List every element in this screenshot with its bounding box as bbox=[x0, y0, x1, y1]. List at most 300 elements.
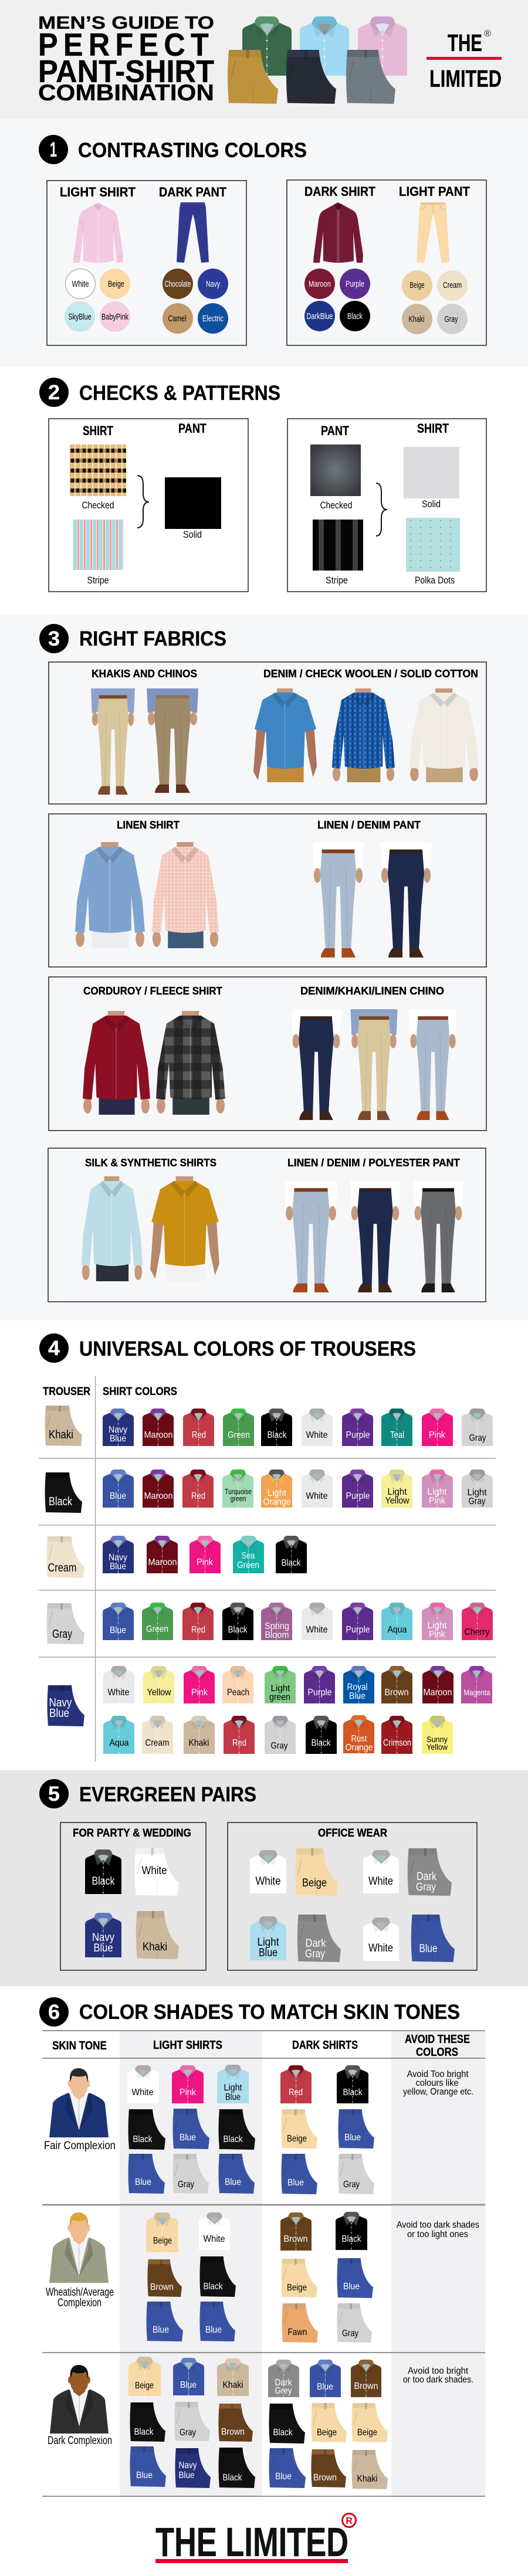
swatch: solid shirt bbox=[404, 447, 459, 510]
person: fair complexion bbox=[44, 2068, 116, 2152]
shirt: brown: Brown bbox=[385, 1688, 408, 1698]
shirt: navy blue: Navy bbox=[109, 1425, 127, 1435]
shirt: magenta bbox=[461, 1666, 492, 1703]
shirt: white: White bbox=[306, 1491, 328, 1501]
swatches: light shirt colours: BabyPink bbox=[101, 312, 128, 322]
light shirts: Blue bbox=[136, 2470, 153, 2480]
shirt: aqua bbox=[103, 1716, 134, 1754]
shirt: light gray: Gray bbox=[468, 1496, 486, 1506]
shirt: aqua bbox=[381, 1603, 412, 1640]
shirt: rust orange: Rust bbox=[351, 1734, 367, 1744]
section 6: color shades to match skin tones bbox=[39, 1997, 485, 2496]
figures: silk and synthetic shirts bbox=[82, 1176, 219, 1281]
shirt: green bbox=[223, 1409, 254, 1446]
light shirts: Brown bbox=[150, 2282, 174, 2292]
label: shirt: SHIRT bbox=[83, 423, 113, 438]
shirt: red: Red bbox=[191, 1625, 205, 1635]
pair: black shirt bbox=[85, 1849, 121, 1894]
shirt: gray: Gray bbox=[469, 1433, 486, 1443]
dark shirts: Beige bbox=[287, 2134, 307, 2144]
pair: dark gray trouser bbox=[297, 1915, 341, 1962]
light shirts: Blue bbox=[205, 2325, 222, 2335]
shirt: light gray: Light bbox=[467, 1488, 487, 1498]
light shirts bbox=[127, 2065, 255, 2194]
label: light pant: LIGHT PANT bbox=[399, 184, 471, 199]
shirt: green: Green bbox=[228, 1430, 250, 1440]
heading: 6 bbox=[48, 2001, 60, 2024]
shirt: maroon: Maroon bbox=[144, 1430, 172, 1440]
shirt: white bbox=[302, 1469, 333, 1508]
light shirts: White bbox=[203, 2234, 225, 2244]
icon: maroon shirt bbox=[313, 202, 363, 263]
shirt: rust orange: Orange bbox=[345, 1743, 373, 1753]
advice: wheatish complexion bbox=[397, 2220, 479, 2239]
swatches: light pant colours: Beige bbox=[409, 280, 425, 290]
heading: CONTRASTING COLORS bbox=[78, 139, 307, 162]
shirt: maroon bbox=[422, 1666, 453, 1703]
shirt: light pink: Pink bbox=[429, 1496, 446, 1506]
shirt: white: White bbox=[306, 1430, 328, 1440]
swatch: polka dots bbox=[406, 518, 460, 586]
title bbox=[38, 12, 214, 106]
column heading: trouser: TROUSER bbox=[43, 1386, 90, 1398]
dark shirts bbox=[268, 2360, 388, 2489]
light shirts: Black bbox=[134, 2427, 154, 2437]
table header: DARK SHIRTS bbox=[292, 2039, 358, 2052]
light shirts: Blue bbox=[178, 2470, 195, 2480]
light shirts: Blue bbox=[225, 2092, 241, 2102]
pair: dark gray trouser: Dark bbox=[417, 1871, 436, 1883]
light shirts: Gray bbox=[178, 2180, 194, 2190]
pair: navy blue shirt: Blue bbox=[94, 1942, 113, 1954]
shirt: light green: green bbox=[269, 1692, 290, 1702]
shirt: maroon bbox=[143, 1409, 174, 1446]
shirt: turquoise green: Turquoise bbox=[225, 1487, 252, 1496]
swatches: light shirt colours: SkyBlue bbox=[68, 312, 92, 322]
trouser: navy blue bbox=[47, 1685, 84, 1726]
pair: khaki trouser bbox=[136, 1911, 179, 1959]
shirt: black: Black bbox=[282, 1558, 301, 1568]
shirt: crimson bbox=[381, 1716, 412, 1754]
light shirts: Pink bbox=[180, 2088, 197, 2098]
illustration: folded shirts and trousers bbox=[228, 16, 407, 104]
shirt: light pink: Light bbox=[427, 1487, 447, 1497]
swatches: light shirt colours bbox=[65, 269, 130, 332]
label: LINEN SHIRT bbox=[117, 819, 180, 831]
swatches: light shirt colours: White bbox=[72, 279, 89, 289]
shirt: red: Red bbox=[192, 1430, 206, 1440]
heading: 4 bbox=[48, 1337, 60, 1360]
footer logo: The Limited: THE LIMITED bbox=[155, 2519, 348, 2565]
panel: corduroy and fleece bbox=[49, 977, 486, 1131]
shirt: black bbox=[306, 1716, 337, 1754]
shirt: turquoise green: green bbox=[230, 1494, 246, 1503]
shirt: khaki bbox=[184, 1716, 215, 1754]
shirt: blue bbox=[103, 1603, 134, 1640]
row: fair complexion bbox=[44, 2065, 473, 2194]
label: FOR PARTY & WEDDING bbox=[73, 1827, 191, 1839]
advice: wheatish complexion: or too light ones bbox=[407, 2229, 468, 2239]
swatches: dark shirt colours: Black bbox=[347, 311, 363, 321]
light shirts: Beige bbox=[135, 2381, 154, 2391]
dark shirts: Black bbox=[343, 2088, 363, 2098]
pair: white shirt bbox=[363, 1917, 399, 1961]
label: DENIM/KHAKI/LINEN CHINO bbox=[300, 985, 444, 997]
dark shirts: Beige bbox=[357, 2428, 377, 2438]
shirt: white bbox=[302, 1409, 333, 1446]
row: cream trouser bbox=[47, 1536, 307, 1578]
label: dark pant: DARK PANT bbox=[159, 185, 227, 199]
swatch: checked pant: Checked bbox=[320, 500, 352, 511]
swatches: dark shirt colours: Purple bbox=[346, 279, 364, 289]
shirt: royal blue: Blue bbox=[349, 1691, 365, 1701]
pair: dark gray trouser bbox=[408, 1848, 452, 1896]
advice: fair complexion: colours like bbox=[415, 2078, 459, 2088]
icon: navy jeans bbox=[177, 202, 209, 263]
dark shirts: Brown bbox=[284, 2234, 307, 2244]
shirt: sunny yellow bbox=[422, 1716, 453, 1754]
swatches: dark pant colours bbox=[163, 269, 228, 334]
pair: white shirt: White bbox=[368, 1942, 393, 1954]
shirt: navy blue: Navy bbox=[109, 1553, 127, 1563]
panel: khakis and chinos bbox=[49, 662, 486, 804]
shirt: light green: Light bbox=[271, 1684, 290, 1693]
shirt: purple: Purple bbox=[307, 1688, 332, 1698]
person: dark complexion bbox=[48, 2365, 112, 2447]
advice: fair complexion bbox=[403, 2069, 473, 2097]
shirt: khaki: Khaki bbox=[189, 1738, 209, 1748]
light shirts: Black bbox=[203, 2282, 223, 2292]
shirt: light pink bbox=[422, 1603, 453, 1640]
dark shirts: Gray bbox=[343, 2180, 360, 2190]
swatch: polka dots: Polka Dots bbox=[415, 575, 455, 586]
figures: linen shirts bbox=[75, 842, 219, 948]
shirt: cherry: Cherry bbox=[465, 1627, 489, 1637]
pair: white shirt bbox=[363, 1850, 399, 1893]
shirt: red: Red bbox=[232, 1738, 246, 1748]
shirt: purple: Purple bbox=[346, 1625, 370, 1635]
swatches: dark pant colours: Camel bbox=[168, 314, 187, 324]
figures: khaki and chino trousers bbox=[91, 688, 198, 795]
swatches: light pant colours bbox=[402, 270, 468, 334]
shirt: blue: Blue bbox=[110, 1491, 126, 1501]
swatch: solid black bbox=[165, 477, 221, 540]
shirt: sunny yellow: Yellow bbox=[427, 1742, 448, 1752]
section 2: checks and patterns bbox=[39, 378, 486, 592]
dark shirts: Beige bbox=[287, 2283, 307, 2293]
dark shirts: Blue bbox=[344, 2133, 361, 2143]
shirt: black bbox=[276, 1536, 307, 1573]
shirt: rust orange bbox=[343, 1715, 374, 1753]
trouser: navy blue: Navy bbox=[49, 1696, 72, 1709]
logo: The Limited bbox=[427, 29, 502, 92]
dark shirts: Brown bbox=[313, 2473, 337, 2483]
label: LINEN / DENIM / POLYESTER PANT bbox=[287, 1157, 460, 1169]
table rule: second row bbox=[42, 2204, 485, 2205]
row: wheatish complexion bbox=[46, 2212, 479, 2343]
pair: white shirt: White bbox=[256, 1875, 280, 1888]
dark shirts: Gray bbox=[342, 2329, 358, 2339]
panel: patterned shirt, solid pant bbox=[49, 419, 248, 592]
swatches: dark shirt colours: DarkBlue bbox=[306, 311, 333, 321]
shirt: green bbox=[142, 1603, 173, 1640]
pair: khaki trouser: Khaki bbox=[143, 1941, 167, 1953]
heading: RIGHT FABRICS bbox=[79, 627, 226, 650]
title: MEN’S GUIDE TO bbox=[38, 12, 214, 33]
panel: dark shirt light pant bbox=[287, 180, 486, 345]
row: navy blue trouser bbox=[47, 1666, 492, 1754]
shirt: white bbox=[302, 1603, 333, 1640]
pair: light blue shirt bbox=[250, 1916, 286, 1960]
label: OFFICE WEAR bbox=[318, 1827, 387, 1839]
logo: The Limited: LIMITED bbox=[429, 65, 502, 92]
shirt: light yellow: Yellow bbox=[385, 1496, 409, 1506]
shirt: black: Black bbox=[311, 1738, 331, 1748]
label: shirt: SHIRT bbox=[417, 421, 449, 436]
figures: linen, denim and polyester trousers bbox=[285, 1181, 463, 1292]
pair: white shirt bbox=[250, 1850, 286, 1893]
shirt: gray: Gray bbox=[271, 1741, 287, 1751]
shirt: sea green: Green bbox=[237, 1560, 259, 1570]
heading: 1 bbox=[50, 138, 57, 161]
shirt: magenta: Magenta bbox=[463, 1688, 490, 1697]
swatches: light pant colours: Gray bbox=[445, 314, 458, 324]
dark shirts: Grey bbox=[275, 2386, 292, 2396]
shirt: gray bbox=[462, 1409, 493, 1446]
shirt: purple: Purple bbox=[346, 1430, 370, 1440]
shirt: maroon: Maroon bbox=[148, 1557, 177, 1567]
swatches: dark pant colours: Chocolate bbox=[164, 279, 191, 289]
shirt: light orange: Orange bbox=[263, 1497, 291, 1507]
light shirts: White bbox=[131, 2088, 154, 2098]
row: khaki trouser bbox=[45, 1406, 493, 1446]
shirt: blue: Blue bbox=[110, 1625, 126, 1635]
person: fair complexion: Fair Complexion bbox=[44, 2140, 116, 2152]
shirt: gray bbox=[265, 1716, 296, 1754]
heading bbox=[39, 1997, 460, 2027]
figures: linen and denim trousers bbox=[313, 842, 432, 958]
trouser: black bbox=[45, 1472, 82, 1513]
light shirts: Blue bbox=[180, 2133, 196, 2143]
icon: pink shirt bbox=[73, 202, 123, 263]
swatches: dark shirt colours: Maroon bbox=[309, 279, 331, 289]
panel: office wear bbox=[228, 1822, 477, 1970]
row: dark complexion bbox=[48, 2357, 473, 2489]
table rules bbox=[39, 1376, 496, 1762]
shirt: aqua: Aqua bbox=[109, 1738, 129, 1748]
brace bbox=[376, 483, 387, 536]
column heading: shirt colors: SHIRT COLORS bbox=[103, 1386, 177, 1398]
light shirts: Blue bbox=[180, 2380, 197, 2390]
shirt: black: Black bbox=[268, 1430, 287, 1440]
heading bbox=[39, 135, 307, 164]
panel: light shirt dark pant bbox=[47, 181, 246, 345]
heading bbox=[39, 624, 226, 653]
heading: 5 bbox=[48, 1783, 60, 1805]
heading: 3 bbox=[48, 627, 60, 650]
trouser: navy blue: Blue bbox=[49, 1707, 69, 1720]
trouser: cream bbox=[47, 1536, 84, 1578]
section 4: universal colors of trousers bbox=[39, 1333, 496, 1762]
figures: corduroy and fleece shirts bbox=[83, 1011, 225, 1115]
trouser: gray bbox=[47, 1603, 84, 1644]
shirt: pink bbox=[184, 1666, 215, 1703]
shirt: red bbox=[183, 1409, 214, 1446]
shirt: peach: Peach bbox=[227, 1688, 249, 1698]
shirt: maroon: Maroon bbox=[424, 1688, 452, 1698]
light shirts: Khaki bbox=[223, 2380, 243, 2390]
shirt: sea green: Sea bbox=[242, 1551, 255, 1561]
table header: COLORS bbox=[416, 2046, 458, 2059]
swatches: dark shirt colours bbox=[304, 269, 370, 331]
table column shading bbox=[120, 2031, 485, 2496]
heading: 2 bbox=[48, 381, 60, 404]
light shirts bbox=[128, 2357, 255, 2488]
table header: LIGHT SHIRTS bbox=[153, 2039, 222, 2052]
dark shirts: Brown bbox=[354, 2381, 378, 2391]
dark shirts: Blue bbox=[275, 2472, 292, 2482]
icon: cream pants bbox=[417, 202, 449, 263]
swatch: stripe pant: Stripe bbox=[326, 575, 348, 586]
dark shirts: Blue bbox=[287, 2178, 304, 2188]
shirt: navy blue: Blue bbox=[110, 1562, 126, 1572]
dark shirts: Blue bbox=[317, 2382, 333, 2392]
shirt: maroon bbox=[143, 1469, 174, 1508]
person: dark complexion: Dark Complexion bbox=[48, 2435, 112, 2447]
heading: EVERGREEN PAIRS bbox=[79, 1783, 256, 1806]
figures: denim, khaki and linen chinos bbox=[292, 1009, 456, 1120]
shirt: teal bbox=[381, 1409, 412, 1446]
light shirts bbox=[146, 2212, 236, 2341]
table header bbox=[52, 2033, 470, 2059]
light shirts: Light bbox=[224, 2083, 242, 2093]
shirt: cream: Cream bbox=[145, 1738, 169, 1748]
shirt: purple: Purple bbox=[346, 1491, 370, 1501]
shirt: yellow bbox=[143, 1666, 174, 1703]
table header: AVOID THESE bbox=[405, 2033, 470, 2046]
trouser: khaki: Khaki bbox=[49, 1428, 73, 1441]
pair: blue trouser: Blue bbox=[419, 1943, 438, 1955]
pair: light blue shirt: Blue bbox=[259, 1947, 277, 1959]
pair: white trouser bbox=[135, 1848, 179, 1896]
panel: silk and synthetic bbox=[48, 1148, 486, 1302]
dark shirts: Black bbox=[273, 2428, 293, 2438]
pair: beige trouser bbox=[296, 1848, 338, 1896]
dark shirts: Fawn bbox=[287, 2327, 307, 2337]
light shirts: Navy bbox=[178, 2460, 197, 2470]
shirt: purple bbox=[304, 1666, 335, 1703]
title: PERFECT bbox=[38, 26, 214, 63]
person: wheatish complexion: Wheatish/Average bbox=[46, 2286, 114, 2299]
shirt: navy blue bbox=[103, 1536, 134, 1573]
trouser: gray: Gray bbox=[52, 1628, 72, 1641]
swatches: dark pant colours: Navy bbox=[206, 279, 220, 289]
label: DENIM / CHECK WOOLEN / SOLID COTTON bbox=[263, 668, 478, 680]
trouser: khaki bbox=[45, 1406, 82, 1446]
dark shirts: Khaki bbox=[357, 2474, 378, 2484]
heading: UNIVERSAL COLORS OF TROUSERS bbox=[79, 1338, 416, 1360]
shirt: white bbox=[103, 1666, 134, 1703]
light shirts: Gray bbox=[180, 2428, 196, 2438]
panel: linen bbox=[49, 814, 486, 967]
shirt: spring bloom: Bloom bbox=[265, 1630, 289, 1640]
shirt: blue bbox=[103, 1469, 134, 1508]
shirt: royal blue: Royal bbox=[347, 1682, 367, 1692]
swatch: stripe pant bbox=[313, 520, 363, 586]
header bbox=[38, 12, 502, 106]
light shirts: Black bbox=[223, 2134, 243, 2144]
heading bbox=[39, 1779, 256, 1808]
swatches: dark pant colours: Electric bbox=[202, 314, 224, 324]
advice: wheatish complexion: Avoid too dark shades bbox=[397, 2220, 479, 2230]
shirt: teal: Teal bbox=[390, 1430, 404, 1440]
shirt: black: Black bbox=[228, 1625, 248, 1635]
footer logo: The Limited: R bbox=[346, 2516, 353, 2526]
label: LINEN / DENIM PANT bbox=[317, 819, 421, 831]
shirt: light orange: Light bbox=[268, 1488, 287, 1498]
row: black trouser bbox=[45, 1469, 493, 1513]
pair: beige trouser: Beige bbox=[302, 1877, 327, 1889]
shirt: light gray bbox=[462, 1469, 493, 1508]
shirt: black bbox=[222, 1603, 253, 1640]
advice: fair complexion: yellow, Orange etc. bbox=[403, 2087, 473, 2097]
section 3: right fabrics bbox=[39, 624, 486, 1302]
swatch: checked: Checked bbox=[82, 500, 114, 511]
logo: The Limited: THE bbox=[448, 29, 482, 56]
pair: white shirt: White bbox=[368, 1875, 393, 1888]
shirt: navy blue bbox=[103, 1409, 134, 1446]
heading bbox=[39, 378, 280, 407]
shirt: aqua: Aqua bbox=[387, 1625, 407, 1635]
section 1: contrasting colors bbox=[39, 135, 486, 345]
dark shirts bbox=[280, 2212, 373, 2343]
shirt: light pink: Pink bbox=[429, 1630, 446, 1640]
shirt: royal blue bbox=[343, 1666, 374, 1703]
shirt: light pink: Light bbox=[427, 1621, 447, 1631]
pair: dark gray trouser: Dark bbox=[305, 1937, 326, 1950]
shirt: red bbox=[224, 1716, 255, 1754]
shirt: cream bbox=[142, 1716, 173, 1754]
light shirts: Black bbox=[223, 2473, 242, 2483]
swatch: checked bbox=[70, 444, 126, 511]
heading bbox=[39, 1333, 416, 1363]
swatch: solid shirt: Solid bbox=[422, 498, 441, 510]
shirt: brown bbox=[381, 1666, 412, 1703]
shirt: purple bbox=[342, 1603, 373, 1640]
pair: blue trouser bbox=[411, 1915, 455, 1962]
dark shirts: Red bbox=[289, 2088, 303, 2098]
advice: dark complexion: or too dark shades. bbox=[403, 2375, 473, 2385]
shirt: purple bbox=[342, 1409, 373, 1446]
shirt: yellow: Yellow bbox=[147, 1688, 171, 1698]
shirt: light pink bbox=[422, 1469, 453, 1508]
shirt: maroon: Maroon bbox=[144, 1491, 172, 1501]
dark shirts: Beige bbox=[317, 2428, 337, 2438]
shirt: maroon bbox=[147, 1536, 178, 1573]
pair: light blue shirt: Light bbox=[257, 1936, 279, 1949]
pair: white trouser: White bbox=[142, 1865, 167, 1877]
light shirts: Beige bbox=[153, 2236, 172, 2246]
label: dark shirt: DARK SHIRT bbox=[304, 184, 375, 199]
swatch: checked pant bbox=[310, 444, 361, 511]
swatch: stripe: Stripe bbox=[87, 575, 109, 586]
shirt: white: White bbox=[108, 1688, 130, 1698]
light shirts: Blue bbox=[225, 2177, 241, 2187]
shirt: pink bbox=[189, 1536, 221, 1573]
dark shirts: Black bbox=[341, 2234, 361, 2244]
label: pant: PANT bbox=[321, 423, 349, 438]
shirt: pink: Pink bbox=[429, 1430, 446, 1440]
